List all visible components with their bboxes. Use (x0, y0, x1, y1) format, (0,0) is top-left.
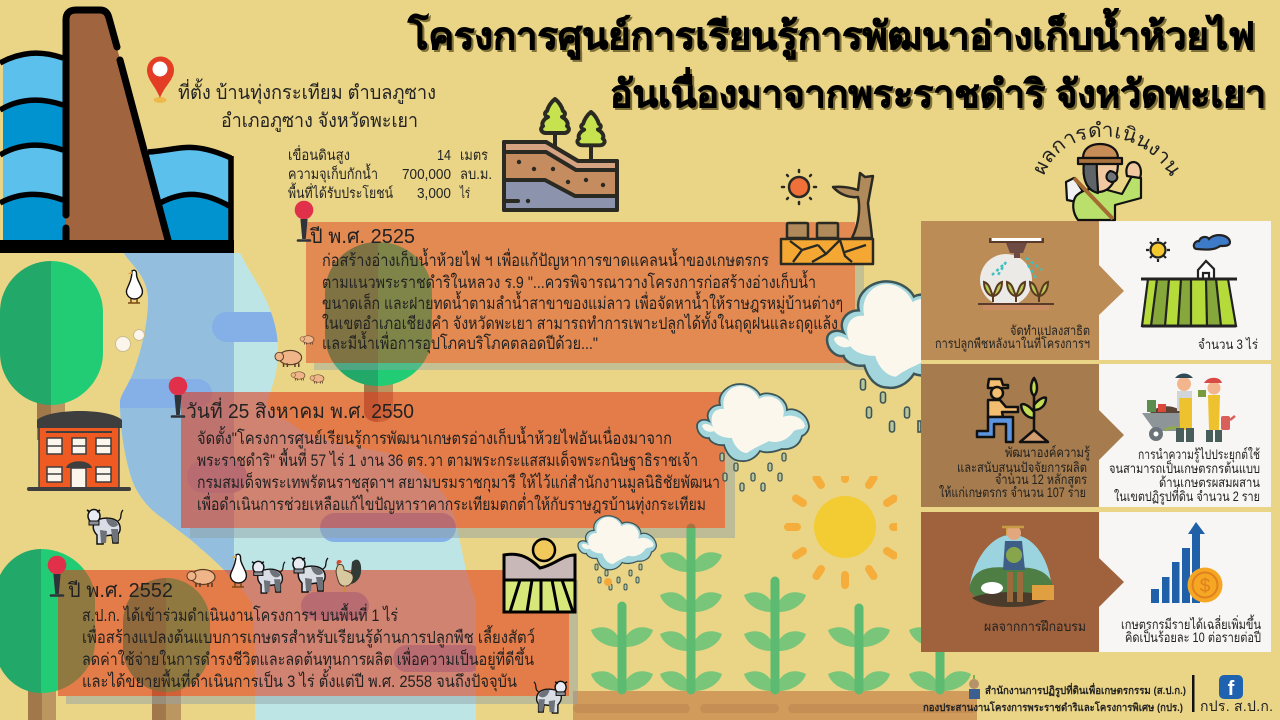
dam stats table: ไร่ (459, 184, 470, 202)
icon: gardener (977, 378, 1048, 442)
text: row 2 left: จำนวน 12 หลักสูตร (995, 472, 1087, 488)
icon: location pin (147, 57, 174, 103)
dam stats table: 700,000 (402, 167, 451, 183)
text: row 1 left: จัดทำแปลงสาธิต (1010, 323, 1090, 338)
icon: chicks (116, 330, 144, 352)
location text (178, 78, 436, 133)
footer text: กองประสานงานโครงการพระราชดำริและโครงการพิเศษ (กปร.) (923, 701, 1183, 714)
text: box 1: ตามแนวพระราชดำริในหลวง ร.9 "...ควรพิจารณาวางโครงการก่อสร้างอ่างเก็บน้ำ (322, 270, 816, 292)
icon: cow bottom (534, 681, 567, 713)
panel: box 2 (181, 392, 725, 528)
dam stats table (288, 145, 492, 202)
location text: ที่ตั้ง บ้านทุ่งกระเทียม ตำบลภูซาง (178, 78, 436, 105)
text: row 2 left: และสนับสนุนปัจจัยการผลิต (957, 460, 1087, 476)
icon: drought (781, 170, 873, 264)
heading: box 1 (295, 201, 415, 248)
text: row 3 right (1121, 614, 1261, 645)
footer (923, 675, 1273, 714)
text: box 2: พระราชดำริ" พื้นที่ 57 ไร่ 1 งาน 36 ตร.วา ตามพระกระแสสมเด็จพระกนิษฐาธิราชเจ้า (197, 448, 698, 471)
panel: box 3 (58, 570, 569, 696)
text: box 2: เพื่อดำเนินการช่วยเหลือแก้ไขปัญหาราคากระเทียมตกต่ำให้กับราษฎรบ้านทุ่งกระเทียม (197, 492, 706, 515)
text: box 1: ก่อสร้างอ่างเก็บน้ำห้วยไฟ ฯ เพื่อแก้ปัญหาการขาดแคลนน้ำของเกษตรกร (322, 248, 769, 270)
text: row 2 right (1109, 446, 1260, 505)
title: อันเนื่องมาจากพระราชดำริ จังหวัดพะเยา (612, 69, 1268, 118)
text: box 3: เพื่อสร้างแปลงต้นแบบการเกษตรสำหรับเรียนรู้ด้านการปลูกพืช เลี้ยงสัตว์ (82, 625, 535, 648)
text: row 1 right: จำนวน 3 ไร่ (1198, 337, 1258, 352)
icon: farmer woman in garden (969, 526, 1054, 607)
tree 1 (0, 261, 103, 440)
title (407, 8, 1268, 118)
dam stats table: ลบ.ม. (460, 167, 492, 183)
tree 2 (325, 242, 432, 422)
text: box 1: และมีน้ำเพื่อการอุปโภคบริโภคตลอดปีด้วย..." (322, 331, 598, 354)
river (120, 253, 476, 720)
heading: box 3 (48, 556, 173, 602)
title: โครงการศูนย์การเรียนรู้การพัฒนาอ่างเก็บน้ำห้วยไฟ (409, 10, 1257, 62)
icon: field (1141, 235, 1237, 326)
dam stats table: 14 (437, 148, 451, 164)
shadow: box 3 (66, 580, 578, 704)
text: box 3: ส.ป.ก. ได้เข้าร่วมดำเนินงานโครงการฯ บนพื้นที่ 1 ไร่ (82, 603, 398, 625)
icon: income chart: $ (1200, 576, 1211, 597)
dam stats table: เมตร (460, 148, 488, 164)
heading: box 2 (169, 377, 414, 423)
icon: footer mascot (969, 675, 980, 699)
icon: animal row (187, 554, 361, 593)
shadow: box 1 (314, 231, 864, 370)
text: box 3: และได้ขยายพื้นที่ดำเนินการเป็น 3 ไร่ ตั้งแต่ปี พ.ศ. 2558 จนถึงปัจจุบัน (82, 669, 517, 692)
panel: result row 2 (921, 364, 1271, 507)
text: box 2 (197, 426, 720, 515)
text: box 1: ขนาดเล็ก และฝายทดน้ำตามลำน้ำสาขาของแม่ลาว เพื่อจัดหาน้ำให้ราษฎรหมู่บ้านต่างๆ (322, 291, 843, 314)
garden bed (573, 691, 977, 720)
panel: box 1 (306, 222, 855, 363)
icon: income chart (1151, 522, 1222, 603)
text: row 2 left: พัฒนาองค์ความรู้ (1005, 444, 1090, 461)
text: box 1: ในเขตอำเภอเชียงคำ จังหวัดพะเยา สามารถทำการเพาะปลูกได้ทั้งในฤดูฝนและฤดูแล้ง (322, 311, 838, 334)
dam stats table: พื้นที่ได้รับประโยชน์ (288, 182, 393, 202)
dam stats table: 3,000 (417, 186, 451, 202)
tree 4 (123, 578, 210, 720)
icon: rooster (336, 560, 361, 592)
text: row 3 left: ผลจากการฝึกอบรม (984, 619, 1086, 634)
text: box 2: จัดตั้ง"โครงการศูนย์เรียนรู้การพัฒนาเกษตรอ่างเก็บน้ำห้วยไฟอันเนื่องมาจาก (197, 426, 672, 449)
location text: อำเภอภูซาง จังหวัดพะเยา (221, 110, 418, 133)
text: box 2: กรมสมเด็จพระเทพรัตนราชสุดาฯ สยามบรมราชกุมารี ให้ไว้แก่สำนักงานมูลนิธิชัยพัฒนา (197, 471, 720, 493)
text: facebook name: กปร. ส.ป.ก. (1200, 698, 1273, 714)
icon: house (27, 411, 131, 491)
icon: facebook (1219, 675, 1243, 700)
text: box 1 (322, 248, 843, 354)
icon: farmers with wheelbarrow (1142, 374, 1235, 442)
text: box 3: ลดค่าใช้จ่ายในการดำรงชีวิตและลดต้นทุนการผลิต เพื่อความเป็นอยู่ที่ดีขึ้น (82, 647, 534, 670)
icon: crop field (504, 539, 575, 612)
icon: goose (126, 270, 142, 303)
icon: pigs (275, 336, 324, 384)
text: row 2 left (939, 444, 1090, 500)
icon: large cloud (826, 280, 921, 433)
icon: sprinkler (978, 238, 1054, 310)
icon: cow near house (87, 510, 123, 544)
icon: small cloud (578, 516, 656, 590)
title: อันเนื่องมาจากพระราชดำริ จังหวัดพะเยา (610, 67, 1266, 116)
heading: box 1: ปี พ.ศ. 2525 (310, 226, 415, 248)
text: row 2 left: ให้แก่เกษตรกร จำนวน 107 ราย (939, 484, 1086, 500)
heading: box 2: วันที่ 25 สิงหาคม พ.ศ. 2550 (186, 397, 414, 423)
text: row 2 right: ด้านเกษตรผสมผสาน (1159, 475, 1260, 490)
text: box 3 (82, 603, 535, 692)
heading: box 3: ปี พ.ศ. 2552 (68, 580, 173, 602)
panel: result row 1 (921, 221, 1271, 360)
panel: result row 3 (921, 512, 1271, 652)
footer text (923, 682, 1186, 714)
tree 3 (0, 549, 95, 720)
dam stats table: ความจุเก็บกักน้ำ (288, 163, 378, 183)
footer text: สำนักงานการปฏิรูปที่ดินเพื่อเกษตรกรรม (ส.ป.ก.) (985, 682, 1186, 698)
plants (591, 528, 971, 691)
icon: farmer mascot (1066, 144, 1141, 220)
text: row 1 left: การปลูกพืชหลังนาในที่โครงการฯ (935, 335, 1090, 352)
text: row 1 left (935, 323, 1090, 352)
icon: facebook: f (1228, 678, 1235, 700)
sun (788, 470, 902, 585)
icon: cloud over box 2 (697, 384, 809, 491)
icon: soil layers with trees (504, 99, 617, 210)
shadow: box 2 (190, 402, 735, 538)
dam stats table: เขื่อนดินสูง (288, 145, 350, 164)
heading: results arc: ผลการดำเนินงาน (1034, 120, 1179, 176)
title: โครงการศูนย์การเรียนรู้การพัฒนาอ่างเก็บน้ำห้วยไฟ (407, 8, 1255, 60)
icon: dam (0, 10, 234, 253)
